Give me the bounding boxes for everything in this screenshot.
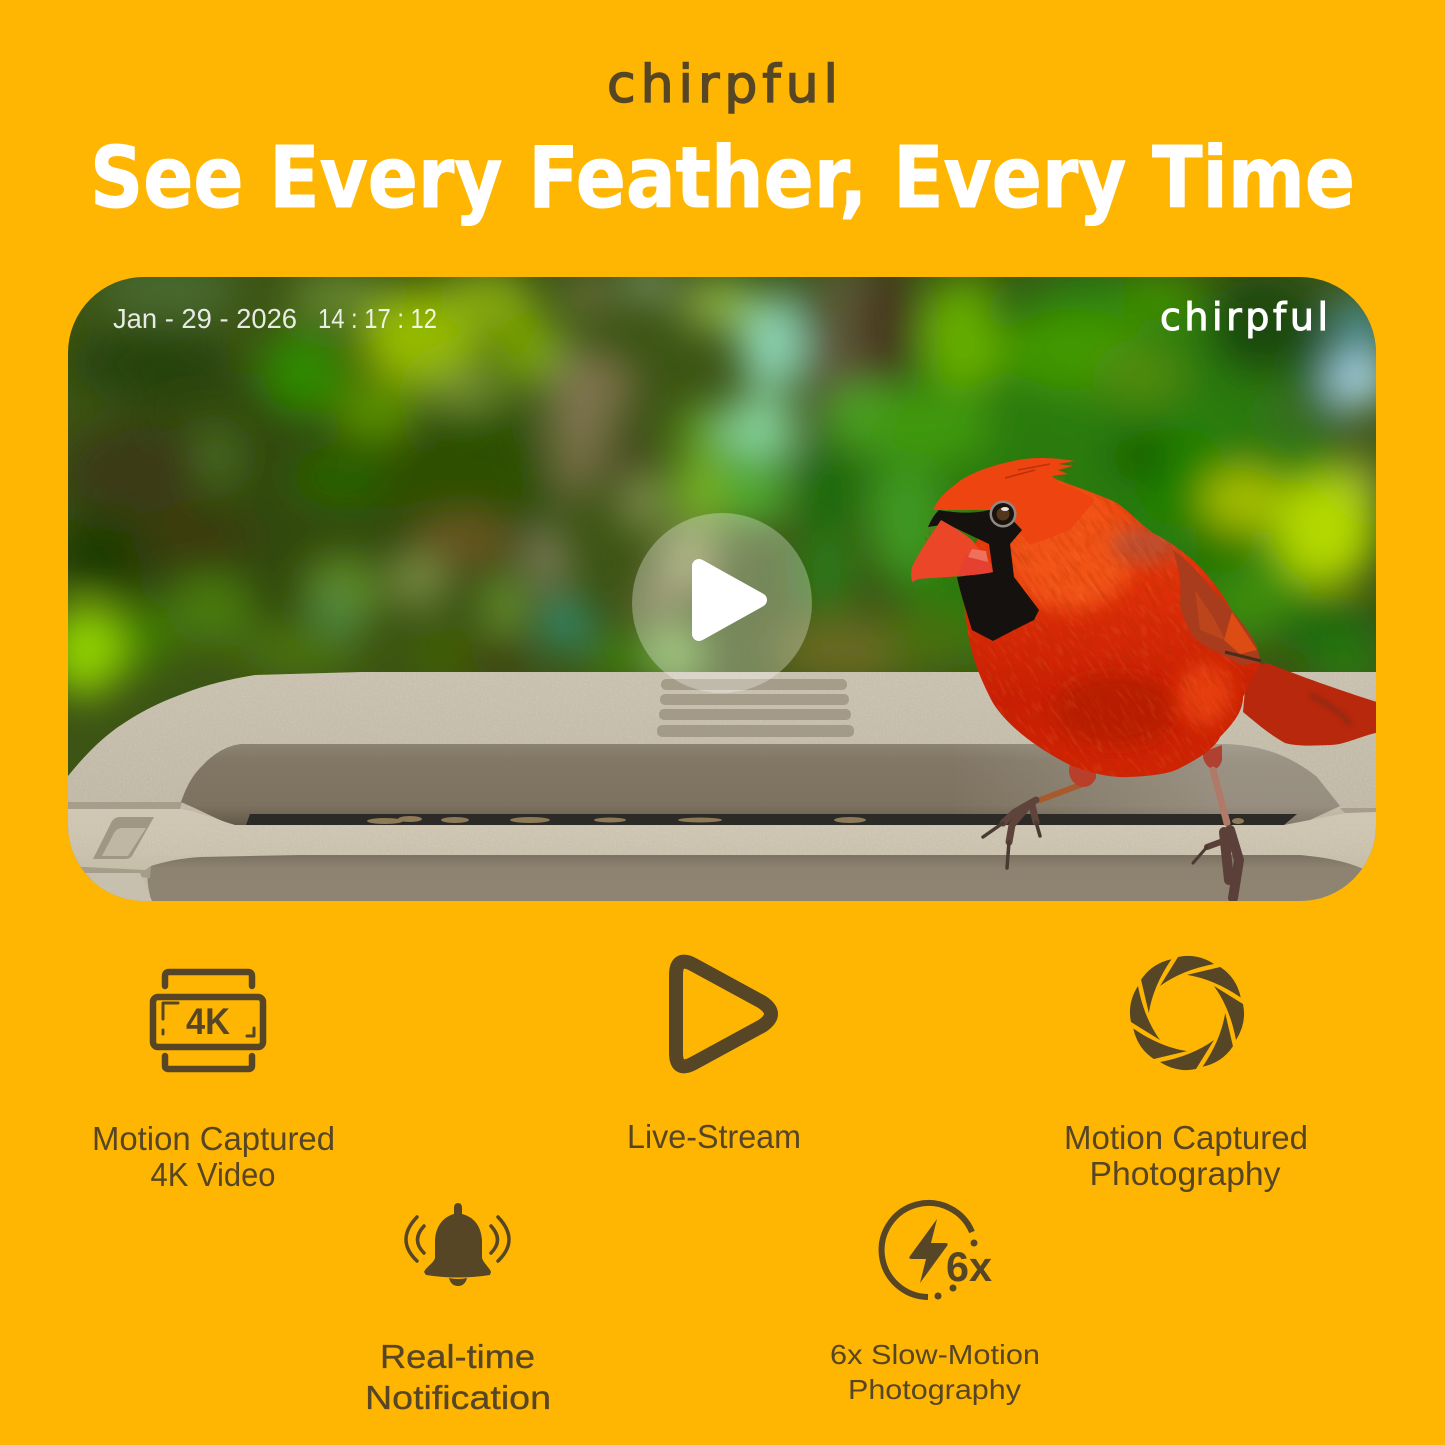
legs <box>983 745 1239 898</box>
blurred foliage backdrop <box>47 259 1392 901</box>
timestamp: Jan - 29 - 2026 <box>113 303 297 334</box>
icon: 6x slow motion <box>882 1203 993 1300</box>
head crest <box>933 458 1095 545</box>
label: live-stream: Live-Stream <box>627 1118 801 1155</box>
lower lip <box>68 809 1376 901</box>
beak <box>911 520 993 582</box>
feeder body <box>68 672 1380 901</box>
icon: play outline <box>676 962 771 1066</box>
label: notification <box>365 1338 551 1416</box>
label: photography: Photography <box>1090 1155 1281 1192</box>
upper channel <box>181 744 1340 826</box>
panel: video still <box>47 259 1392 919</box>
icon: notification bell <box>406 1203 509 1286</box>
vents <box>657 679 854 737</box>
lower channel <box>148 855 1376 901</box>
label: slow motion: 6x Slow-Motion <box>830 1339 1040 1370</box>
wing <box>1173 550 1261 665</box>
ridge line left <box>68 802 182 809</box>
label: notification: Real-time <box>380 1338 535 1375</box>
label: photography: Motion Captured <box>1064 1119 1308 1156</box>
icon: camera aperture <box>1128 954 1246 1072</box>
eye <box>990 500 1016 528</box>
label: photography <box>1064 1119 1308 1192</box>
timestamp: 14 : 17 : 12 <box>318 303 437 334</box>
bird <box>911 458 1376 901</box>
watermark logo: chirpful <box>1160 295 1328 339</box>
seed slot <box>246 814 1297 825</box>
label: notification: Notification <box>365 1379 551 1416</box>
tail <box>1243 663 1380 746</box>
label: slow motion <box>830 1339 1040 1405</box>
icon: 6x slow motion: 6x <box>946 1243 993 1290</box>
label: slow motion: Photography <box>848 1374 1021 1405</box>
black mask <box>928 510 1039 641</box>
logo: chirpful <box>607 55 838 115</box>
label: 4K video <box>92 1120 335 1193</box>
icon: 4K video: 4K <box>186 1001 230 1042</box>
label: 4K video: Motion Captured <box>92 1120 335 1157</box>
play button <box>632 513 812 693</box>
icon: 4K video <box>153 972 263 1069</box>
label: 4K video: 4K Video <box>150 1156 276 1193</box>
body <box>960 472 1260 777</box>
timestamp <box>114 308 436 328</box>
left recess <box>93 817 154 859</box>
